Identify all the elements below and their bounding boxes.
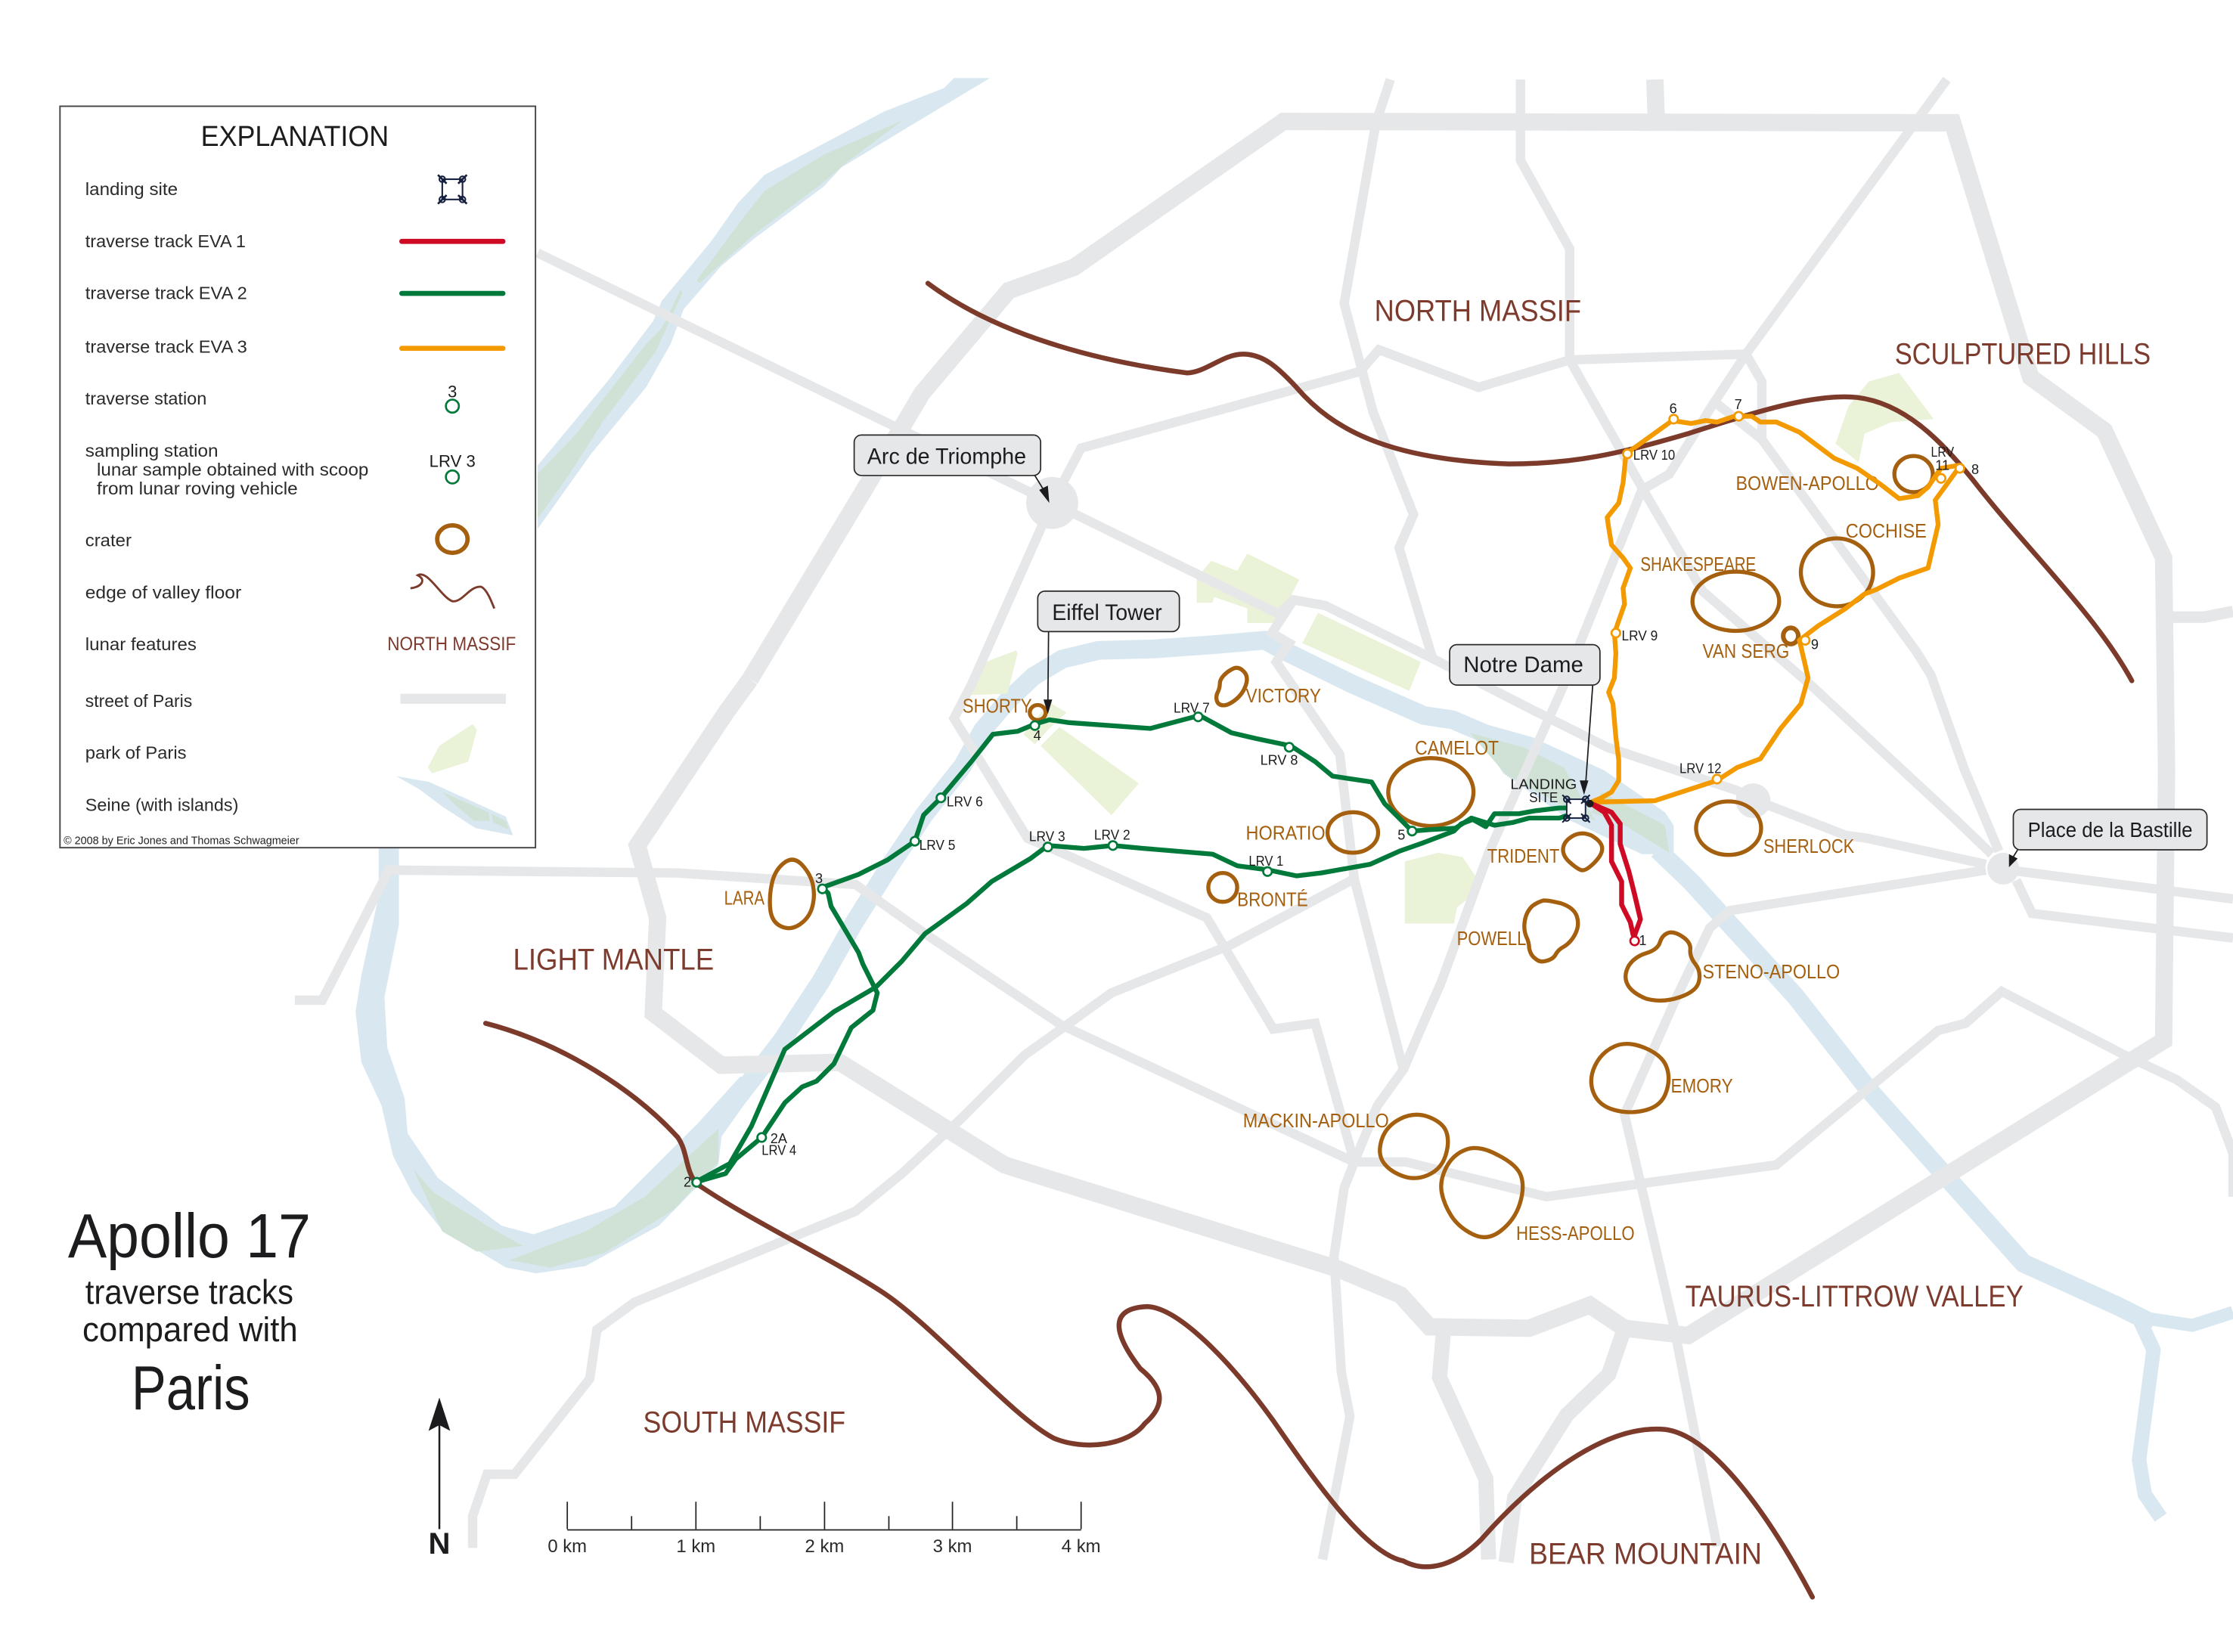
- crater: Shakespeare: [1640, 554, 1779, 631]
- legend row labels: Seine (with islands): [85, 795, 238, 814]
- station labels: 9: [1811, 637, 1819, 652]
- crater: Shorty: SHORTY: [963, 696, 1032, 717]
- legend icon: landing site: [438, 175, 467, 204]
- traverse track EVA 2 (green): [695, 715, 1581, 1182]
- station labels: SITE: [1529, 790, 1558, 805]
- legend row labels: park of Paris: [85, 743, 187, 763]
- panel: explanation legend: [60, 107, 535, 848]
- crater: Trident: TRIDENT: [1487, 846, 1560, 867]
- station labels: LRV 3: [1029, 829, 1065, 845]
- crater: Van Serg: [1703, 628, 1798, 662]
- legend icon: edge of valley floor: [411, 575, 495, 609]
- legend icon: traverse station: 3: [448, 383, 457, 401]
- station labels: 5: [1397, 828, 1405, 843]
- callout: Eiffel Tower: [1037, 591, 1180, 714]
- callout: Place de la Bastille: [2009, 810, 2207, 867]
- legend row labels: street of Paris: [85, 691, 192, 711]
- lunar feature labels: [513, 293, 2151, 1570]
- legend row labels: from lunar roving vehicle: [97, 479, 298, 498]
- crater: Cochise: COCHISE: [1846, 521, 1927, 542]
- edge of valley floor: south: [485, 1023, 1813, 1597]
- copyright note: © 2008 by Eric Jones and Thomas Schwagmeier: [64, 835, 299, 847]
- traverse track EVA 3 (orange): [1591, 417, 1959, 802]
- parks of Paris: [967, 373, 1934, 924]
- title block: Apollo 17: [68, 1202, 311, 1271]
- lunar feature labels: BEAR MOUNTAIN: [1529, 1536, 1762, 1570]
- station labels: 2: [684, 1174, 691, 1189]
- legend icon: traverse station: [446, 383, 459, 413]
- crater: Mackin-Apollo: MACKIN-APOLLO: [1243, 1111, 1389, 1132]
- crater: Victory: VICTORY: [1246, 686, 1321, 707]
- crater: Powell: [1457, 900, 1578, 962]
- station labels: LRV 2: [1094, 828, 1130, 843]
- title block: Paris: [132, 1354, 250, 1423]
- scale bar: 3 km: [933, 1536, 972, 1557]
- station labels: [684, 397, 1979, 1189]
- crater: Horatio: [1246, 812, 1378, 853]
- scale bar: [547, 1502, 1101, 1557]
- title block: compared with: [82, 1310, 298, 1349]
- callout: Arc de Triomphe: Arc de Triomphe: [867, 445, 1026, 470]
- station labels: 8: [1971, 462, 1979, 477]
- lunar feature labels: TAURUS-LITTROW VALLEY: [1686, 1279, 2024, 1313]
- legend heading: EXPLANATION: [201, 120, 389, 153]
- callout: Notre Dame: [1450, 645, 1600, 795]
- legend row labels: traverse track EVA 1: [85, 231, 246, 251]
- crater: Sherlock: SHERLOCK: [1763, 836, 1854, 857]
- lunar feature labels: LIGHT MANTLE: [513, 943, 714, 977]
- callout: Notre Dame: Notre Dame: [1463, 652, 1583, 677]
- crater: Van Serg: VAN SERG: [1703, 641, 1789, 662]
- crater: Emory: EMORY: [1670, 1076, 1733, 1097]
- legend row labels: lunar features: [85, 634, 197, 654]
- lunar feature labels: NORTH MASSIF: [1375, 293, 1581, 327]
- legend sample: street: [400, 694, 506, 704]
- title block: traverse tracks: [85, 1272, 293, 1311]
- scale bar: 4 km: [1062, 1536, 1101, 1557]
- legend row labels: [85, 179, 368, 814]
- station labels: 1: [1639, 933, 1647, 948]
- legend icon: sampling station: [430, 451, 476, 483]
- crater: Bronte: BRONTÉ: [1237, 889, 1308, 911]
- crater: Lara: [724, 860, 814, 928]
- station labels: 6: [1670, 401, 1677, 417]
- crater: Camelot: [1388, 738, 1499, 826]
- lunar feature labels: SCULPTURED HILLS: [1895, 337, 2151, 371]
- station labels: LRV 12: [1679, 761, 1721, 776]
- streets of Paris: [295, 79, 2233, 1562]
- crater: Mackin-Apollo: [1243, 1111, 1448, 1178]
- landing site symbol: [1562, 795, 1589, 823]
- edge of valley floor: north: [928, 284, 2132, 680]
- legend row labels: crater: [85, 531, 132, 550]
- crater: Lara: LARA: [724, 888, 765, 910]
- callout: Place de la Bastille: Place de la Bastille: [2028, 818, 2192, 841]
- crater: Powell: POWELL: [1457, 928, 1526, 950]
- callout: Eiffel Tower: Eiffel Tower: [1052, 600, 1162, 625]
- legend row labels: traverse track EVA 2: [85, 284, 247, 303]
- crater: Hess-Apollo: [1441, 1148, 1635, 1244]
- station labels: LRV 6: [947, 795, 983, 810]
- legend sample: lunar feature: NORTH MASSIF: [387, 634, 516, 655]
- crater: Victory: [1217, 668, 1321, 707]
- station labels: 4: [1034, 728, 1041, 743]
- crater: Emory: [1591, 1044, 1733, 1112]
- legend row labels: traverse track EVA 3: [85, 336, 247, 356]
- legend icon: sampling station: LRV 3: [430, 451, 476, 470]
- station labels: LRV 1: [1248, 854, 1283, 869]
- station labels: LRV 10: [1633, 448, 1675, 463]
- north arrow: [429, 1398, 451, 1561]
- crater: Cochise: [1801, 521, 1927, 606]
- legend icon: crater: [437, 525, 467, 553]
- station labels: 7: [1735, 397, 1742, 412]
- traverse track EVA 1 (red): [1586, 800, 1640, 935]
- legend sample: park: [428, 724, 477, 773]
- legend row labels: sampling station: [85, 441, 219, 460]
- station labels: LRV 9: [1622, 628, 1658, 643]
- crater: Camelot: CAMELOT: [1415, 738, 1499, 759]
- scale bar: 2 km: [805, 1536, 844, 1557]
- crater: Horatio: HORATIO: [1246, 823, 1326, 845]
- lunar feature labels: SOUTH MASSIF: [644, 1405, 845, 1439]
- station labels: LANDING: [1510, 777, 1577, 792]
- crater: Bowen-Apollo: [1736, 456, 1933, 494]
- crater: Sherlock: [1696, 801, 1854, 857]
- river: Seine: [355, 78, 2233, 1517]
- crater: Hess-Apollo: HESS-APOLLO: [1516, 1223, 1635, 1244]
- legend lines: traverse tracks EVA 1, 2, 3: [402, 241, 503, 349]
- station labels: LRV 4: [761, 1142, 796, 1158]
- title block: [68, 1202, 311, 1423]
- legend row labels: traverse station: [85, 389, 206, 408]
- crater: Bowen-Apollo: BOWEN-APOLLO: [1736, 473, 1879, 494]
- callout: Arc de Triomphe: [854, 435, 1050, 503]
- crater: Shakespeare: SHAKESPEARE: [1640, 554, 1756, 575]
- station labels: 2A: [771, 1131, 788, 1146]
- station labels: LRV 7: [1174, 700, 1210, 715]
- legend sample: Seine with islands: [396, 776, 513, 835]
- station labels: LRV 8: [1261, 752, 1298, 767]
- crater: Steno-Apollo: STENO-APOLLO: [1703, 962, 1840, 983]
- scale bar: 0 km: [547, 1536, 587, 1557]
- crater: Bronte: [1208, 873, 1308, 911]
- legend row labels: edge of valley floor: [85, 582, 242, 602]
- north arrow: N: [429, 1526, 451, 1561]
- crater: Steno-Apollo: [1626, 932, 1840, 1000]
- station labels: 11: [1935, 457, 1949, 473]
- station labels: LRV 5: [920, 838, 955, 853]
- legend row labels: lunar sample obtained with scoop: [97, 460, 368, 479]
- station labels: 3: [815, 871, 823, 886]
- islands of the Seine: [414, 120, 1670, 1268]
- traverse and sampling stations: [693, 412, 1964, 1186]
- crater: Trident: [1487, 833, 1602, 870]
- scale bar: 1 km: [676, 1536, 715, 1557]
- station labels: LRV: [1931, 445, 1955, 460]
- legend row labels: landing site: [85, 179, 178, 199]
